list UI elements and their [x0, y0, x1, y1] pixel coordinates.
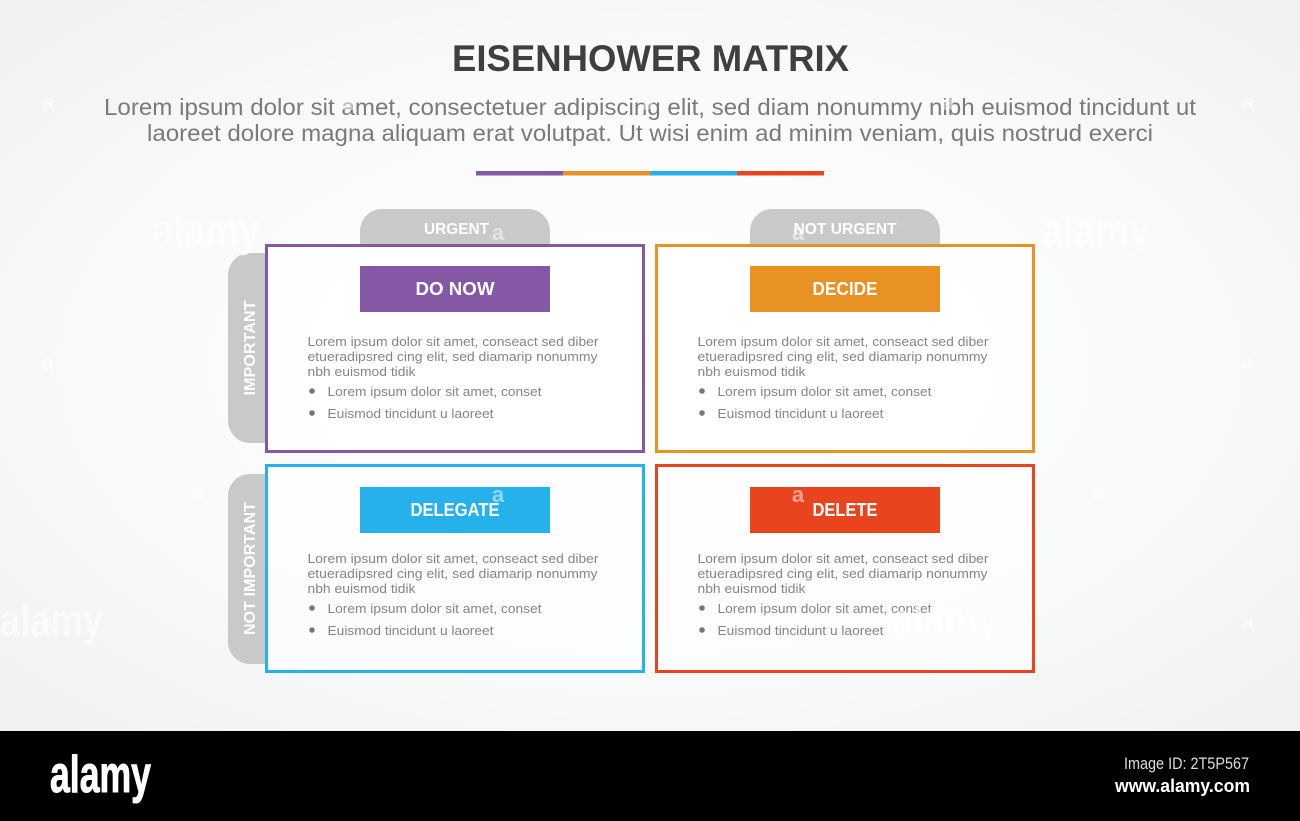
body text: etueradipsred cing elit, sed diamarip nonummy [698, 349, 988, 364]
watermarks: a [1092, 480, 1105, 505]
subtitle text: Lorem ipsum dolor sit amet, consectetuer adipiscing elit, sed diam nonummy nibh euismod tincidunt ut [104, 94, 1197, 120]
bullet list: Lorem ipsum dolor sit amet, conset [718, 384, 932, 399]
watermarks: a [642, 90, 655, 115]
body text: Lorem ipsum dolor sit amet, conseact sed diber [308, 551, 599, 566]
watermarks: a [42, 350, 55, 375]
watermarks: a [792, 482, 805, 507]
body text: Lorem ipsum dolor sit amet, conseact sed diber [698, 551, 989, 566]
heading: delete [750, 487, 940, 533]
body text: etueradipsred cing elit, sed diamarip nonummy [308, 566, 598, 581]
image id: Image ID: 2T5P567 [1124, 754, 1249, 773]
body text: etueradipsred cing elit, sed diamarip nonummy [308, 349, 598, 364]
title: EISENHOWER MATRIX [452, 38, 849, 79]
watermarks: a [1242, 610, 1255, 635]
heading: do now: DO NOW [416, 279, 495, 299]
panel: delegate [266, 466, 644, 672]
subtitle text: laoreet dolore magna aliquam erat volutpat. Ut wisi enim ad minim veniam, quis nostrud exerci [147, 120, 1153, 146]
website: www.alamy.com [1114, 776, 1250, 796]
bullet list [309, 601, 542, 638]
bullet list: Euismod tincidunt u laoreet [328, 406, 494, 421]
body text [698, 334, 989, 379]
footer logo: alamy [50, 746, 151, 804]
tab: not urgent [750, 209, 940, 244]
body text [308, 551, 599, 596]
watermarks: a [192, 480, 205, 505]
tab: not important: NOT IMPORTANT [242, 502, 259, 635]
footer bar [0, 731, 1300, 821]
watermarks: alamy [152, 204, 260, 256]
heading: delegate: DELEGATE [410, 500, 500, 520]
heading: do now [360, 266, 550, 312]
watermarks [0, 90, 1255, 646]
bullet list [699, 601, 932, 638]
body text: Lorem ipsum dolor sit amet, conseact sed diber [308, 334, 599, 349]
watermarks: a [1242, 90, 1255, 115]
bullet list: Lorem ipsum dolor sit amet, conset [718, 601, 932, 616]
watermarks: alamy [0, 594, 103, 646]
body text: Lorem ipsum dolor sit amet, conseact sed diber [698, 334, 989, 349]
tab: not urgent: NOT URGENT [794, 221, 897, 238]
bullet list [309, 384, 542, 421]
panel: do now [266, 246, 644, 452]
body text: etueradipsred cing elit, sed diamarip nonummy [698, 566, 988, 581]
body text: nbh euismod tidik [308, 581, 416, 596]
watermarks: a [342, 90, 355, 115]
panel: delete [656, 466, 1034, 672]
bullet list: Euismod tincidunt u laoreet [718, 623, 884, 638]
bullet list: Euismod tincidunt u laoreet [718, 406, 884, 421]
watermarks: a [42, 610, 55, 635]
colour divider [476, 171, 824, 176]
subtitle text [104, 94, 1197, 146]
body text [698, 551, 989, 596]
panel border [656, 466, 1034, 672]
bullet list: Lorem ipsum dolor sit amet, conset [328, 384, 542, 399]
tab: important: IMPORTANT [242, 300, 259, 395]
watermarks: a [942, 90, 955, 115]
tab: not important [228, 474, 265, 664]
tab: urgent: URGENT [424, 221, 489, 238]
bullet list: Euismod tincidunt u laoreet [328, 623, 494, 638]
heading: decide: DECIDE [812, 279, 878, 299]
watermarks: a [1242, 350, 1255, 375]
panel: decide [656, 246, 1034, 452]
heading: delegate [360, 487, 550, 533]
panel border [266, 246, 644, 452]
body text: nbh euismod tidik [698, 581, 806, 596]
body text: nbh euismod tidik [698, 364, 806, 379]
panel border [266, 466, 644, 672]
watermarks: alamy [892, 594, 999, 646]
bullet list: Lorem ipsum dolor sit amet, conset [328, 601, 542, 616]
watermarks: a [792, 220, 805, 245]
watermarks: a [42, 90, 55, 115]
body text [308, 334, 599, 379]
watermarks: a [492, 220, 505, 245]
bullet list [699, 384, 932, 421]
body text: nbh euismod tidik [308, 364, 416, 379]
panel border [656, 246, 1034, 452]
watermarks: a [492, 482, 505, 507]
watermarks: alamy [1042, 204, 1150, 256]
tab: important [228, 253, 265, 443]
heading: decide [750, 266, 940, 312]
heading: delete: DELETE [812, 500, 878, 520]
tab: urgent [360, 209, 550, 244]
